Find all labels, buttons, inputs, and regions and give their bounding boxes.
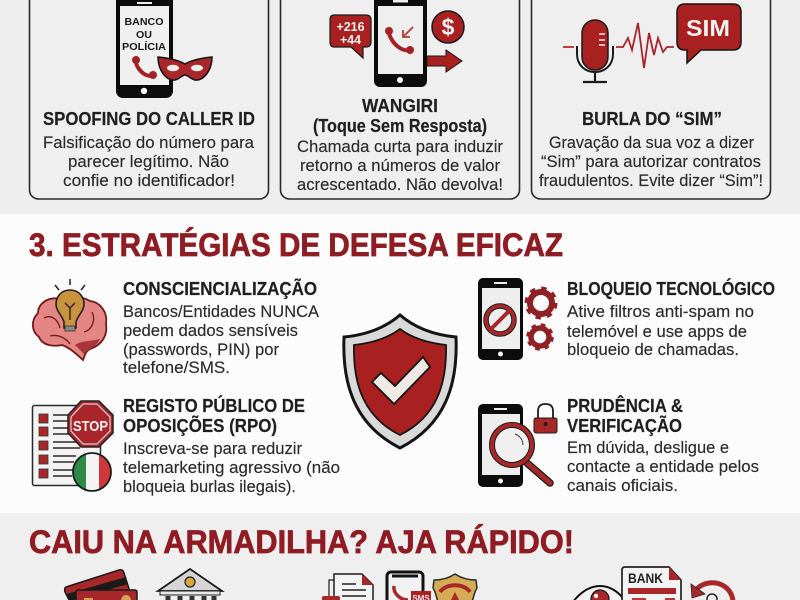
icon: bank statement: BANK [628, 570, 663, 586]
heading: prudência [567, 395, 683, 436]
text: bloqueio description: bloqueio de chamadas. [567, 340, 739, 359]
text: spoofing description: Falsificação do número para [43, 133, 255, 152]
icon: phone with sms [387, 572, 431, 600]
heading: wangiri [313, 96, 487, 136]
icon: brain with light bulb [33, 279, 106, 360]
panel: burla do sim [532, 0, 770, 199]
icon: documents [322, 574, 373, 600]
item: bloqueio tecnológico [478, 278, 775, 360]
item: registo público de oposições [32, 395, 340, 496]
heading: registo público [123, 395, 305, 436]
section: defense strategies [29, 226, 774, 496]
text: wangiri description: retorno a números de valor [300, 156, 500, 175]
icon: bank statement [622, 567, 681, 600]
heading: registo público: REGISTO PÚBLICO DE [123, 395, 305, 416]
text: burla description: “Sim” para autorizar contratos [541, 152, 761, 171]
section: attack types [0, 0, 800, 214]
text: spoofing description [43, 133, 255, 190]
heading: section 3: 3. ESTRATÉGIAS DE DEFESA EFICAZ [29, 227, 563, 263]
text: bloqueio description [567, 302, 754, 359]
icon: phone with block sign and gears [478, 278, 556, 360]
text: wangiri description [297, 137, 503, 194]
heading: caiu na armadilha: CAIU NA ARMADILHA? AJA RÁPIDO! [29, 524, 574, 560]
icon: list with stop sign and flag [32, 401, 113, 492]
text: consciencialização description: pedem dados sensíveis [123, 321, 298, 340]
heading: registo público: OPOSIÇÕES (RPO) [123, 415, 277, 436]
icon: phone with mask [116, 0, 212, 98]
text: bloqueio description: telemóvel e use apps de [567, 322, 747, 341]
text: wangiri description: acrescentado. Não devolva! [297, 175, 503, 194]
icon: eye [572, 586, 626, 600]
text: consciencialização description: Bancos/Entidades NUNCA [123, 302, 320, 321]
icon: phone with missed call: +216 [336, 20, 365, 34]
icon: phone with mask: OU [136, 29, 152, 41]
heading: bloqueio tecnológico: BLOQUEIO TECNOLÓGICO [567, 278, 775, 299]
text: spoofing description: confie no identificador! [63, 171, 235, 190]
icon: circular arrow [691, 583, 733, 600]
text: prudência description: canais oficiais. [567, 476, 678, 495]
item: consciencialização [33, 278, 320, 377]
text: burla description [539, 133, 763, 190]
text: registo público description [123, 439, 340, 496]
text: registo público description: bloqueia burlas ilegais). [123, 477, 296, 496]
icon: phone with missed call [330, 0, 464, 87]
text: prudência description [567, 438, 759, 495]
icon: microphone with voice wave: SIM [686, 15, 730, 41]
heading: spoofing: SPOOFING DO CALLER ID [43, 109, 255, 129]
icon: phone with magnifier and lock [478, 404, 557, 487]
icon: microphone with voice wave [563, 4, 741, 82]
text: registo público description: telemarketing agressivo (não [123, 458, 340, 477]
text: consciencialização description [123, 302, 320, 377]
icon: bank cards [65, 570, 137, 600]
panel: spoofing do caller id [30, 0, 268, 199]
text: prudência description: Em dúvida, desligue e [567, 438, 729, 457]
heading: wangiri: WANGIRI [362, 96, 438, 116]
text: spoofing description: parecer legítimo. Não [68, 152, 229, 171]
panel: wangiri [280, 0, 520, 199]
item: prudência e verificação [478, 395, 759, 495]
icon: phone with missed call: $ [442, 14, 455, 40]
heading: prudência: VERIFICAÇÃO [567, 415, 682, 436]
heading: burla: BURLA DO “SIM” [582, 109, 722, 129]
icon: phone with missed call: +44 [340, 33, 361, 47]
text: wangiri description: Chamada curta para induzir [297, 137, 503, 156]
heading: consciencialização: CONSCIENCIALIZAÇÃO [123, 278, 317, 299]
icon: phone with mask: POLÍCIA [122, 40, 166, 53]
text: consciencialização description: (passwords, PIN) por [123, 340, 279, 359]
text: consciencialização description: telefone/SMS. [123, 358, 230, 377]
text: burla description: fraudulentos. Evite dizer “Sim”! [539, 171, 763, 190]
icon: phone with mask: BANCO [124, 16, 164, 28]
icon: bank building [158, 569, 222, 600]
text: bloqueio description: Ative filtros anti-spam no [567, 302, 754, 321]
text: registo público description: Inscreva-se para reduzir [123, 439, 302, 458]
icon: central shield with check [344, 315, 456, 448]
heading: prudência: PRUDÊNCIA & [567, 395, 683, 416]
heading: wangiri: (Toque Sem Resposta) [313, 116, 487, 136]
section: what to do if scammed [0, 513, 800, 600]
icon: police badge [433, 574, 477, 600]
text: burla description: Gravação da sua voz a dizer [549, 133, 754, 152]
text: prudência description: contacte a entidade pelos [567, 457, 759, 476]
icon: list with stop sign and flag: STOP [73, 418, 108, 435]
